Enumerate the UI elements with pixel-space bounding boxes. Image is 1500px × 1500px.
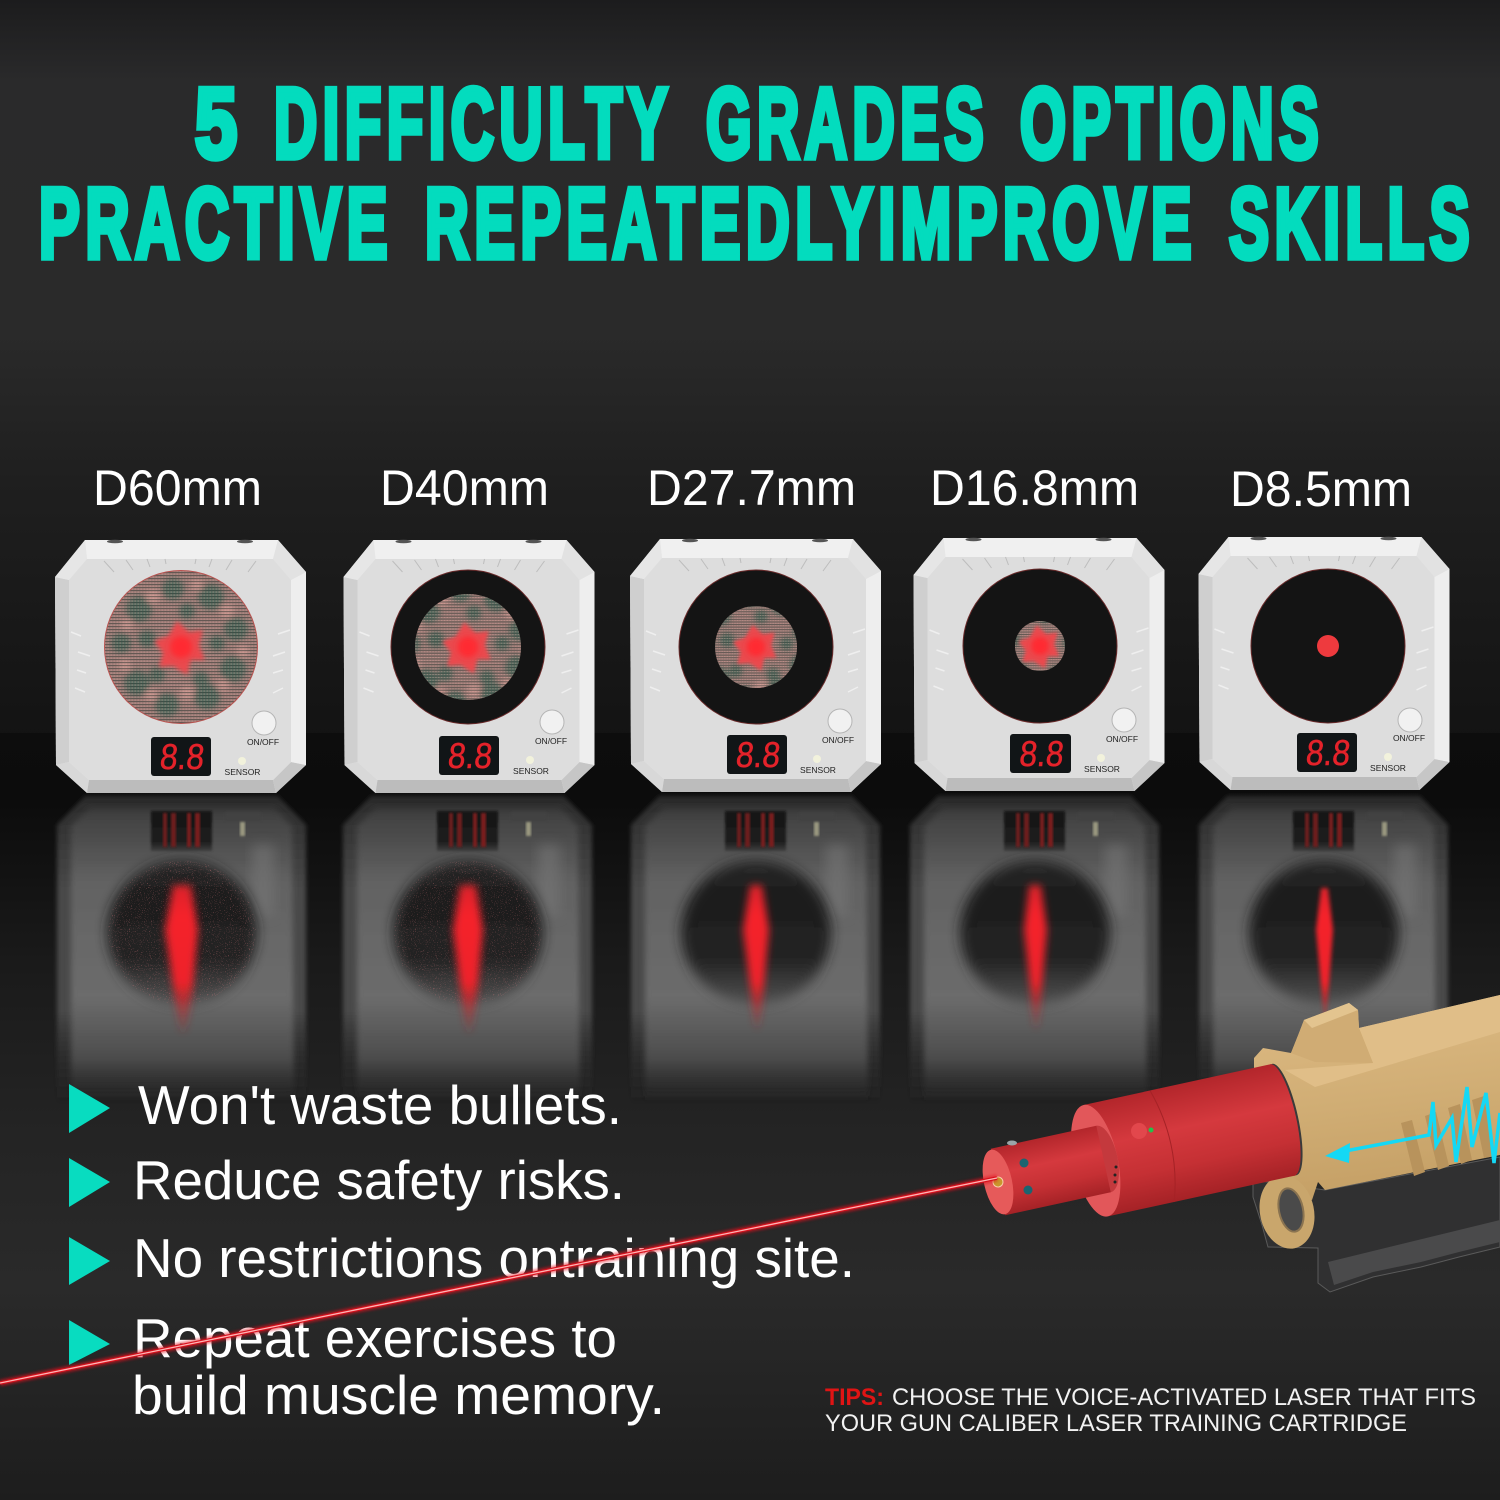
digital display: 8.8 xyxy=(158,736,206,777)
title: PRACTIVE xyxy=(39,168,393,278)
digital display: 8.8 xyxy=(446,735,494,776)
pistol slide xyxy=(1254,995,1500,1200)
reflection: D16.8mm target xyxy=(910,796,1159,1105)
diameter labels: D16.8mm xyxy=(930,460,1139,516)
target opening D60 xyxy=(101,567,261,727)
laser cartridge xyxy=(972,1061,1310,1241)
device: D40mm target: ON/OFF xyxy=(535,736,567,746)
tips note: CHOOSE THE VOICE-ACTIVATED LASER THAT FITS xyxy=(892,1384,1476,1411)
benefits list: Won't waste bullets. xyxy=(138,1074,622,1136)
slide top facet xyxy=(1285,995,1500,1087)
laser beam xyxy=(0,1178,997,1383)
digital display: 8.8 xyxy=(1018,733,1066,774)
tips note: TIPS: xyxy=(825,1384,884,1411)
benefits list: build muscle memory. xyxy=(132,1364,665,1426)
cartridge button xyxy=(1131,1123,1147,1139)
device: D60mm target: ON/OFF xyxy=(247,737,279,747)
diameter labels xyxy=(93,460,1412,517)
diameter labels: D8.5mm xyxy=(1230,461,1412,517)
title: GRADES xyxy=(706,68,989,178)
benefits list: Repeat exercises to xyxy=(133,1307,617,1369)
background floor xyxy=(0,733,1500,1500)
pistol xyxy=(1253,995,1500,1292)
benefits list: Reduce safety risks. xyxy=(133,1149,625,1211)
device: D8.5mm target xyxy=(1198,537,1450,790)
device: D40mm target: SENSOR xyxy=(513,766,549,776)
device: D27.7mm target: ON/OFF xyxy=(822,735,854,745)
device: D16.8mm target: ON/OFF xyxy=(1106,734,1138,744)
digital display: 8.8 xyxy=(734,734,782,775)
bullet markers xyxy=(69,1084,110,1365)
target opening D16.8 xyxy=(963,569,1117,723)
title: DIFFICULTY xyxy=(274,68,673,178)
reflection: D60mm target xyxy=(57,796,306,1105)
target opening D40 xyxy=(391,570,545,724)
device: D8.5mm target: ON/OFF xyxy=(1393,733,1425,743)
device: D8.5mm target: SENSOR xyxy=(1370,763,1406,773)
device: D27.7mm target: SENSOR xyxy=(800,765,836,775)
reflection: D8.5mm target xyxy=(1199,796,1448,1105)
digital display: 8.8 xyxy=(1304,732,1352,773)
benefits list: No restrictions ontraining site. xyxy=(133,1227,855,1289)
slide serrations xyxy=(1401,1096,1494,1176)
cyan recoil arrow xyxy=(1325,1087,1500,1163)
reflection: D40mm target xyxy=(343,796,592,1105)
power button xyxy=(1398,708,1422,732)
reflection: D27.7mm target xyxy=(631,796,880,1105)
device: D40mm target xyxy=(344,540,594,793)
cartridge barrel xyxy=(972,1061,1310,1241)
device: D60mm target xyxy=(55,540,306,793)
diameter labels: D60mm xyxy=(93,460,262,516)
pistol frame xyxy=(1253,1157,1500,1292)
power button xyxy=(540,710,564,734)
pistol front ring xyxy=(1253,1170,1321,1254)
cartridge vents xyxy=(1007,1140,1118,1194)
diameter labels: D40mm xyxy=(380,460,549,516)
tips note xyxy=(825,1384,1476,1437)
device: D16.8mm target: SENSOR xyxy=(1084,764,1120,774)
power button xyxy=(828,709,852,733)
title: 5 xyxy=(195,68,244,178)
diameter labels: D27.7mm xyxy=(647,460,856,516)
rear sight xyxy=(1291,1003,1373,1063)
tips note: YOUR GUN CALIBER LASER TRAINING CARTRIDGE xyxy=(825,1410,1407,1437)
device: D60mm target: SENSOR xyxy=(225,767,260,777)
background wall xyxy=(0,0,1500,740)
power button xyxy=(1112,708,1136,732)
power button xyxy=(252,711,276,735)
benefits list xyxy=(69,1074,855,1426)
target opening D8.5 xyxy=(1251,569,1405,723)
device: D27.7mm target xyxy=(630,539,881,792)
device: D16.8mm target xyxy=(914,538,1164,791)
title xyxy=(39,68,1475,278)
target opening D27.7 xyxy=(679,570,833,724)
